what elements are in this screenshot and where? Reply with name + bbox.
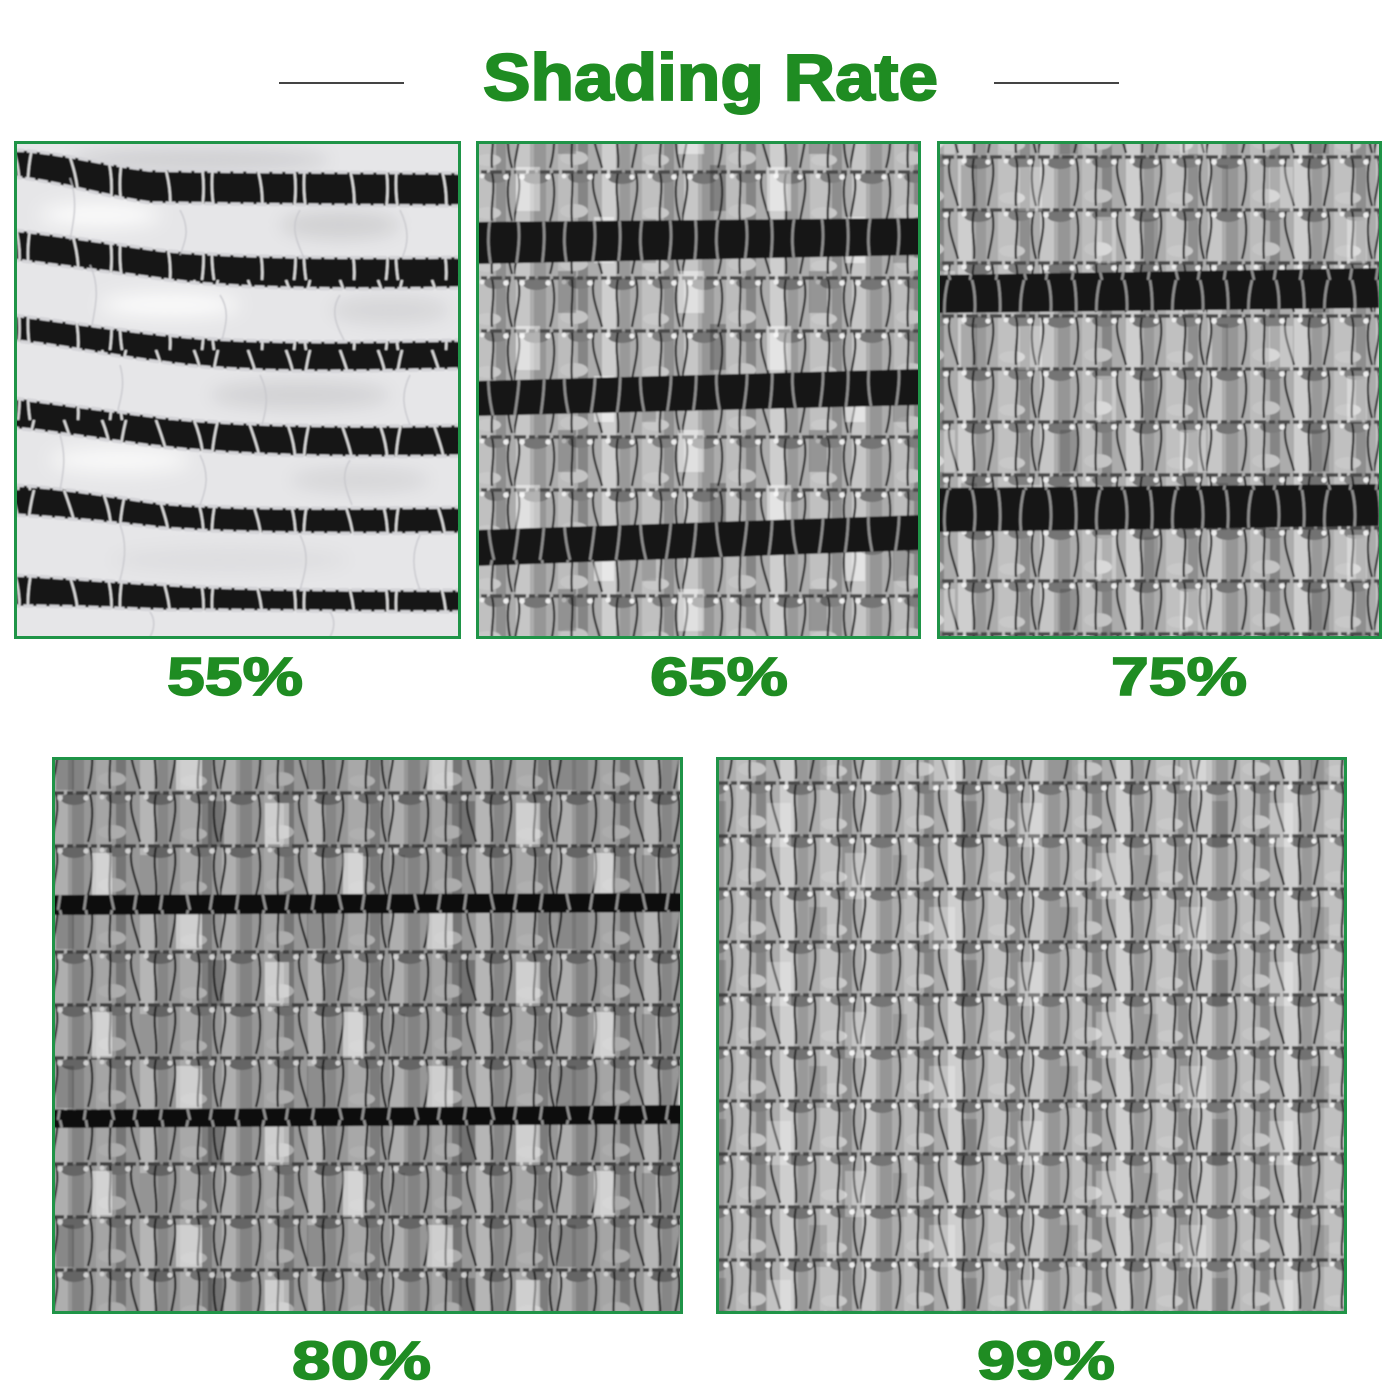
title rule left xyxy=(279,82,404,84)
stitched edges xyxy=(14,150,461,612)
black bands xyxy=(476,218,921,566)
black bands xyxy=(937,268,1382,532)
black bands xyxy=(52,893,683,1128)
title text: Shading Rate xyxy=(483,40,938,114)
panel: 65% shade net xyxy=(476,141,921,639)
label: 75%: 75% xyxy=(1111,647,1247,707)
label: 80%: 80% xyxy=(292,1331,431,1391)
mesh strands on bands xyxy=(14,150,461,612)
panel: 75% shade net xyxy=(937,141,1382,639)
band strands xyxy=(52,893,683,1128)
title rule right xyxy=(994,82,1119,84)
panel: 80% shade net xyxy=(52,757,683,1314)
label: 55%: 55% xyxy=(167,647,303,707)
label: 99%: 99% xyxy=(977,1331,1115,1391)
label: 65%: 65% xyxy=(650,647,788,707)
black bands xyxy=(14,150,461,612)
band strands xyxy=(937,268,1382,532)
band strands xyxy=(476,218,921,566)
panel: 55% shade net xyxy=(14,141,461,639)
strands on white xyxy=(60,178,420,637)
panel: 99% shade net xyxy=(716,757,1347,1314)
